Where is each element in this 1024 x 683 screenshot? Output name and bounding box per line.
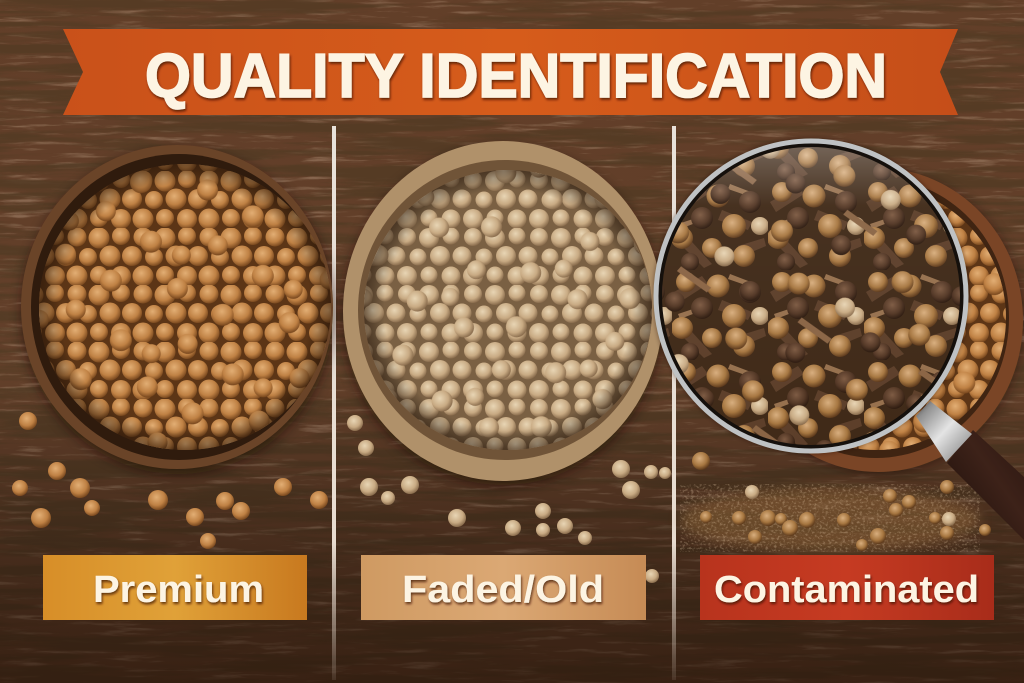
panel: contaminated bowl — [733, 168, 1023, 472]
label: faded/old: Faded/Old — [402, 569, 604, 611]
banner: title — [63, 29, 958, 115]
magnifier handle — [947, 430, 1024, 540]
contaminated powder and seeds — [680, 452, 991, 552]
lens contents — [662, 147, 960, 445]
premium seeds — [39, 164, 331, 450]
label: premium — [43, 555, 307, 620]
label: contaminated — [700, 555, 994, 620]
panel: faded bowl — [343, 141, 663, 485]
label: premium: Premium — [93, 569, 264, 611]
icon: magnifying glass — [650, 135, 1024, 540]
label: faded/old — [361, 555, 646, 620]
title text: QUALITY IDENTIFICATION — [145, 42, 887, 111]
premium scattered seeds — [12, 412, 328, 549]
divider right — [672, 126, 676, 680]
faded seeds — [364, 170, 652, 450]
faded scattered seeds — [347, 415, 671, 583]
panel: premium bowl — [21, 145, 334, 474]
divider left — [332, 126, 336, 680]
label: contaminated: Contaminated — [714, 569, 979, 611]
magnifier neck — [916, 401, 972, 462]
